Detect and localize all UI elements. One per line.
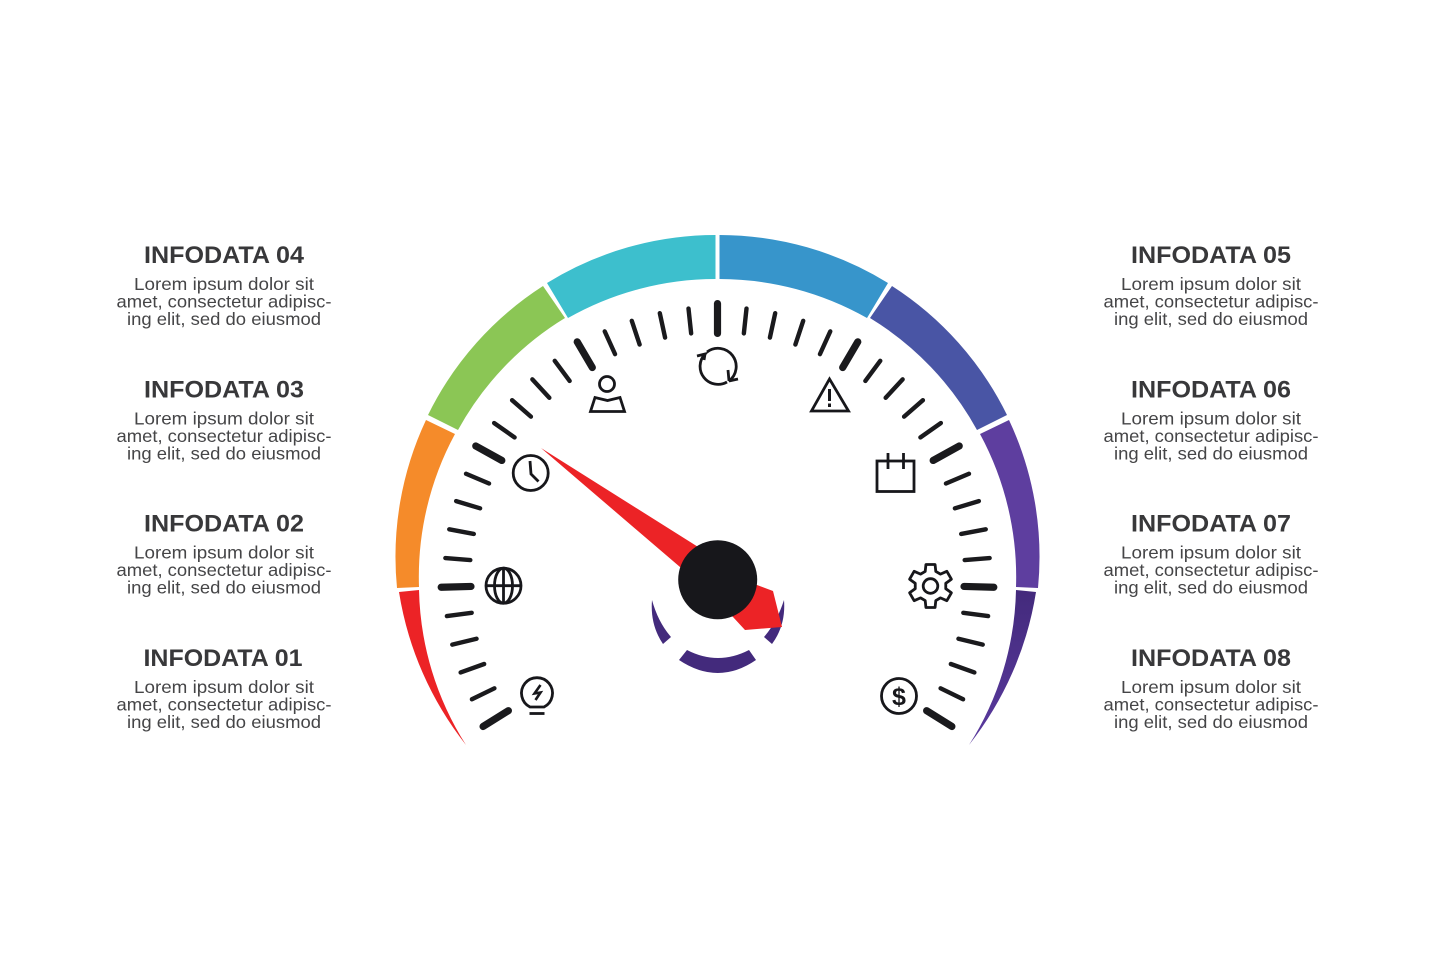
label: infodata 03: Lorem ipsum dolor sit: [134, 408, 314, 428]
segment 01: red: [399, 590, 466, 745]
label: infodata 08: [1104, 645, 1319, 732]
segment 06: indigo: [870, 286, 1007, 430]
segment 08: dark purple: [969, 590, 1036, 745]
segment 03: green: [428, 286, 565, 430]
icon: dollar coin: [882, 678, 916, 714]
label: infodata 02: Lorem ipsum dolor sit: [134, 542, 314, 562]
label: infodata 04: [116, 242, 332, 329]
label: infodata 03: [116, 376, 332, 464]
label: infodata 03: ing elit, sed do eiusmod: [127, 444, 321, 464]
lower hub arcs: [652, 600, 784, 673]
segment 04: teal: [547, 235, 716, 318]
segment 02: orange: [395, 420, 455, 588]
label: infodata 01: INFODATA 01: [144, 645, 302, 672]
label: infodata 03: INFODATA 03: [144, 376, 304, 404]
label: infodata 05: Lorem ipsum dolor sit: [1121, 274, 1301, 294]
label: infodata 05: ing elit, sed do eiusmod: [1114, 309, 1308, 329]
label: infodata 04: INFODATA 04: [144, 242, 305, 269]
label: infodata 06: INFODATA 06: [1131, 376, 1291, 404]
label: infodata 08: INFODATA 08: [1131, 645, 1291, 672]
gauge ring: [395, 235, 1040, 745]
label: infodata 01: [116, 645, 332, 732]
icon: person on map: [590, 376, 624, 412]
label: infodata 08: Lorem ipsum dolor sit: [1121, 677, 1301, 697]
label: infodata 07: Lorem ipsum dolor sit: [1121, 542, 1301, 562]
label: infodata 04: ing elit, sed do eiusmod: [127, 309, 321, 329]
label: infodata 05: INFODATA 05: [1131, 242, 1291, 269]
label: infodata 06: [1104, 376, 1319, 464]
icon: light bulb: [521, 678, 552, 714]
label: infodata 07: [1104, 510, 1319, 598]
needle hub: [678, 540, 757, 619]
label: infodata 08: amet, consectetur adipisc-: [1104, 694, 1319, 714]
segment 07: purple: [980, 420, 1040, 588]
icon: refresh: [697, 348, 738, 384]
icon: globe: [486, 568, 521, 603]
icon: gear: [910, 564, 951, 608]
label: infodata 06: Lorem ipsum dolor sit: [1121, 408, 1301, 428]
label: infodata 07: amet, consectetur adipisc-: [1104, 560, 1319, 580]
icon: calendar: [877, 453, 914, 492]
label: infodata 04: amet, consectetur adipisc-: [116, 292, 332, 312]
label: infodata 07: INFODATA 07: [1131, 510, 1291, 538]
label: infodata 06: amet, consectetur adipisc-: [1104, 426, 1319, 446]
label: infodata 08: ing elit, sed do eiusmod: [1114, 712, 1308, 732]
label: infodata 02: ing elit, sed do eiusmod: [127, 578, 321, 598]
icon: warning triangle: [812, 379, 848, 411]
label: infodata 05: [1104, 242, 1319, 329]
label: infodata 04: Lorem ipsum dolor sit: [134, 274, 314, 294]
tick marks: [441, 304, 994, 726]
label: infodata 01: ing elit, sed do eiusmod: [127, 712, 321, 732]
label: infodata 02: [116, 510, 332, 598]
segment 05: blue: [720, 235, 888, 318]
label: infodata 02: amet, consectetur adipisc-: [116, 560, 332, 580]
label: infodata 02: INFODATA 02: [144, 510, 304, 538]
label: infodata 06: ing elit, sed do eiusmod: [1114, 444, 1308, 464]
needle: [541, 448, 782, 630]
label: infodata 01: Lorem ipsum dolor sit: [134, 677, 314, 697]
label: infodata 03: amet, consectetur adipisc-: [116, 426, 332, 446]
label: infodata 07: ing elit, sed do eiusmod: [1114, 578, 1308, 598]
label: infodata 01: amet, consectetur adipisc-: [116, 694, 332, 714]
icon: dollar coin: $: [892, 683, 906, 711]
icon: clock: [513, 456, 548, 490]
panel: left labels: [116, 242, 332, 732]
label: infodata 05: amet, consectetur adipisc-: [1104, 292, 1319, 312]
panel: right labels: [1104, 242, 1319, 732]
